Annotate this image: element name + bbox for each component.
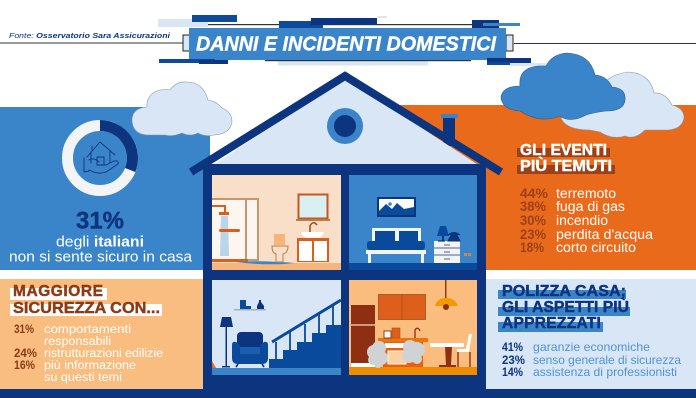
room: living with stairs [212, 280, 341, 375]
list: polizza casa: 14% [502, 365, 523, 379]
list: eventi temuti: terremoto [556, 186, 616, 201]
list: maggiore sicurezza: ristrutturazioni edilizie [44, 348, 163, 360]
heading: gli eventi [517, 142, 615, 175]
heading: gli eventi: GLI EVENTI [520, 142, 607, 159]
list: polizza casa: 41% [502, 340, 523, 354]
list: polizza casa: 23% [502, 353, 525, 367]
list: maggiore sicurezza [14, 324, 163, 384]
list: maggiore sicurezza: 24% [14, 348, 37, 360]
list: maggiore sicurezza: comportamenti [44, 324, 131, 336]
list: maggiore sicurezza: più informazione [44, 360, 136, 372]
list: polizza casa: assistenza di professionisti [533, 365, 677, 379]
list: polizza casa: senso generale di sicurezza [533, 353, 681, 367]
list: eventi temuti: 30% [520, 213, 546, 228]
heading: maggiore sicurezza: SICUREZZA CON... [13, 300, 160, 317]
title banner: DANNI E INCIDENTI DOMESTICI [196, 32, 497, 56]
heading: polizza casa: GLI ASPETTI PIÙ [502, 298, 629, 316]
list: eventi temuti [520, 186, 654, 255]
smoke right [402, 340, 425, 364]
walls [203, 164, 486, 389]
heading: polizza casa: APPREZZATI [502, 315, 601, 332]
stat: 31% italians: 31% [76, 208, 124, 234]
list: maggiore sicurezza: responsabili [44, 336, 111, 348]
panel: light blue lower right [484, 279, 696, 389]
list: eventi temuti: 38% [520, 199, 546, 214]
list: eventi temuti: corto circuito [556, 240, 636, 255]
icon: house in hand [84, 142, 118, 173]
list: polizza casa: garanzie economiche [533, 340, 650, 354]
stat: 31% italians [9, 208, 193, 266]
cloud: right light [561, 72, 684, 137]
title banner [158, 15, 546, 66]
cloud: right blue [501, 53, 625, 120]
cloud: left [132, 82, 232, 136]
list: polizza casa [502, 340, 681, 379]
source line: Fonte: Osservatorio Sara Assicurazioni [9, 31, 171, 40]
list: eventi temuti: 44% [520, 186, 548, 201]
list: maggiore sicurezza: su questi temi [44, 372, 122, 384]
ground band [0, 389, 696, 398]
list: maggiore sicurezza: 31% [14, 324, 34, 336]
heading: polizza casa: POLIZZA CASA; [502, 283, 626, 300]
panel: orange background right [400, 105, 696, 270]
roof [191, 76, 501, 172]
heading: polizza casa [498, 283, 630, 332]
list: eventi temuti: 23% [520, 227, 546, 242]
list: eventi temuti: incendio [556, 213, 608, 228]
stat: 31% italians: degli italiani [56, 234, 144, 250]
list: eventi temuti: 18% [520, 240, 544, 255]
house [191, 76, 501, 389]
panel: blue background left [0, 107, 210, 270]
room: bedroom [349, 175, 477, 270]
chimney [441, 114, 458, 146]
donut chart: 31% [68, 126, 132, 190]
heading: maggiore sicurezza [10, 283, 162, 317]
panel: peach lower left [0, 279, 205, 389]
stat: 31% italians: non si sente sicuro in casa [9, 250, 193, 266]
gable [212, 78, 480, 166]
heading: maggiore sicurezza: MAGGIORE [13, 283, 104, 300]
list: eventi temuti: perdita d'acqua [556, 227, 654, 242]
list: eventi temuti: fuga di gas [556, 199, 625, 214]
smoke left [367, 341, 388, 368]
list: maggiore sicurezza: 16% [14, 360, 35, 372]
room: bathroom [212, 175, 341, 270]
round window [327, 108, 363, 144]
heading: gli eventi: PIÙ TEMUTI [520, 157, 612, 175]
room: kitchen [349, 280, 477, 375]
